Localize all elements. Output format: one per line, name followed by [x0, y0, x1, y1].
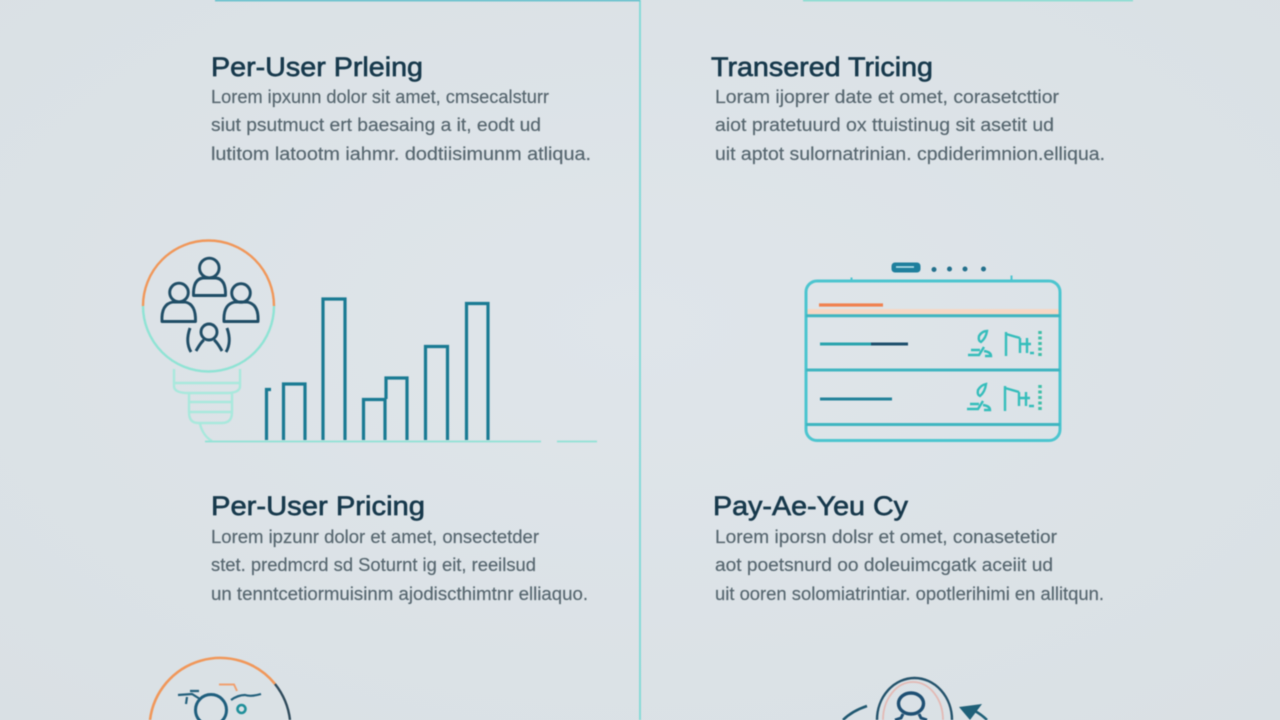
- icon: pricing table: [806, 262, 1060, 440]
- panel: top-right pricing text: [711, 52, 1105, 164]
- body text: top-right: uit aptot sulornatrinian. cpdiderimnion.elliqua.: [715, 143, 1105, 164]
- person shoulders: [895, 714, 927, 720]
- left cycle arc: [843, 706, 867, 720]
- heading: Per-User Prleing: Per-User Prleing: [211, 52, 423, 82]
- orange row line: [819, 303, 883, 307]
- body text: top-right: aiot pratetuurd ox ttuistinug sit asetit ud: [715, 114, 1054, 135]
- row icons: upper: [968, 331, 1040, 357]
- heading: Per-User Pricing: Per-User Pricing: [211, 491, 425, 521]
- users group: [162, 258, 258, 352]
- icon: bottom-right person with cycle arrows: [843, 678, 987, 720]
- body text: bottom-right: Lorem iporsn dolsr et omet, conasetetior: [715, 526, 1057, 547]
- outer dark ring: [877, 678, 952, 720]
- orange accent line: [219, 684, 237, 691]
- peach header band: [807, 309, 1059, 314]
- body text: top-right: [715, 86, 1105, 164]
- heading: Transered Tricing: Transered Tricing: [711, 52, 933, 82]
- dark circle arc: [275, 684, 290, 720]
- dark strokes: [178, 691, 261, 704]
- top rule: right column: [803, 0, 1133, 2]
- lower row line: [820, 398, 892, 400]
- bulb base: [174, 369, 240, 441]
- body text: top-left: [211, 86, 591, 164]
- body text: bottom-left: Lorem ipzunr dolor et amet, onsectetder: [211, 526, 539, 547]
- icon: light bulb with users: [143, 240, 274, 441]
- dark row line: [871, 342, 908, 346]
- body text: bottom-right: uit ooren solomiatrintiar. opotlerihimi en allitqun.: [715, 583, 1104, 604]
- table frame and rows: [806, 281, 1060, 440]
- person head: [898, 693, 924, 714]
- vertical column divider: [639, 0, 641, 720]
- bars: [266, 390, 271, 440]
- body text: bottom-left: stet. predmcrd sd Soturnt ig eit, reeilsud: [211, 554, 536, 575]
- teal row line: [820, 342, 871, 346]
- table top pill and dots: [852, 262, 1012, 280]
- body text: top-right: Loram ijoprer date et omet, corasetcttior: [715, 86, 1059, 107]
- row icons: lower: [967, 384, 1040, 412]
- inner pink ring: [883, 682, 943, 720]
- body text: top-left: Lorem ipxunn dolor sit amet, cmsecalsturr: [211, 86, 549, 107]
- bar chart: [205, 299, 597, 442]
- body text: bottom-left: [211, 526, 588, 604]
- orange circle arc: [150, 658, 275, 720]
- panel: top-left pricing text: [211, 52, 591, 164]
- bulb glass upper orange arc: [143, 240, 274, 306]
- body text: top-left: lutitom latootm iahmr. dodtiisimunm atliqua.: [211, 143, 591, 164]
- body text: top-left: siut psutmuct ert baesaing a it, eodt ud: [211, 114, 541, 135]
- right cycle arrow: [959, 704, 987, 720]
- bulb glass lower arc: [143, 306, 274, 372]
- heading: Pay-Ae-Yeu Cy: Pay-Ae-Yeu Cy: [713, 491, 909, 521]
- body text: bottom-left: un tenntcetiormuisinm ajodiscthimtnr elliaquo.: [211, 583, 588, 604]
- panel: bottom-right pricing text: [713, 491, 1104, 604]
- chart baseline: [205, 440, 597, 442]
- central circle: [196, 694, 226, 720]
- icon: bottom-left circle with figures: [150, 658, 290, 720]
- body text: bottom-right: [715, 526, 1104, 604]
- small teal circle: [238, 705, 246, 713]
- panel: bottom-left pricing text: [211, 491, 588, 604]
- body text: bottom-right: aot poetsnurd oo doleuimcgatk aceiit ud: [715, 554, 1053, 575]
- top rule: left column: [215, 0, 640, 2]
